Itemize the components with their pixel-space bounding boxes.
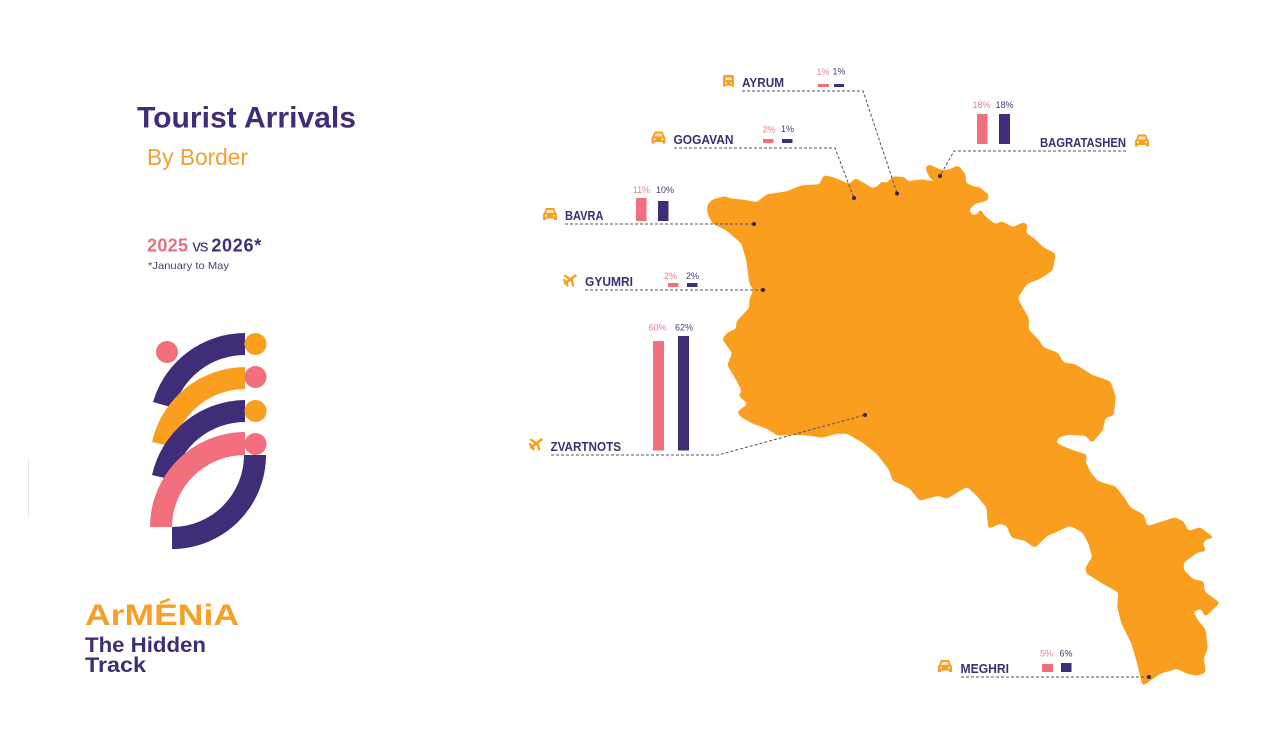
station: Zvartnots: [530, 322, 867, 455]
brand wordmark: Track: [85, 654, 146, 677]
station: Ayrum: 1%: [816, 67, 830, 77]
station: Bavra: BAVRA: [565, 209, 604, 223]
station: Bagratashen: 18%: [995, 100, 1014, 110]
icon: car: [652, 132, 666, 144]
station: Gyumri: 2%: [664, 271, 677, 281]
station: Bavra: [543, 185, 756, 226]
station: Ayrum: AYRUM: [742, 76, 784, 90]
footnote: period: *January to May: [148, 260, 230, 272]
station: Zvartnots: 62%: [675, 322, 693, 332]
station: Bagratashen: 18%: [972, 100, 991, 110]
station: Zvartnots: 60%: [648, 322, 667, 332]
station: Bavra: 11%: [633, 185, 650, 195]
brand wordmark: The Hidden: [85, 634, 206, 657]
station: Meghri: 6%: [1059, 648, 1073, 658]
station: Gyumri: [564, 271, 765, 292]
icon: train: [723, 75, 734, 87]
title: Tourist Arrivals: [137, 102, 356, 134]
station: Bagratashen: [938, 100, 1149, 178]
station: Gogavan: 2%: [762, 124, 776, 134]
station: Gogavan: GOGAVAN: [674, 133, 734, 147]
icon: plane: [530, 440, 542, 450]
station: Meghri: [938, 648, 1151, 679]
station: Ayrum: 1%: [832, 66, 846, 76]
subtitle: by border: By Border: [147, 144, 248, 170]
station: Bagratashen: BAGRATASHEN: [1040, 136, 1126, 150]
station: Ayrum: [723, 66, 899, 196]
station: Meghri: MEGHRI: [960, 662, 1009, 676]
station: Gogavan: [652, 124, 856, 200]
station: Gyumri: GYUMRI: [585, 275, 633, 289]
icon: car: [543, 208, 557, 220]
year comparison heading: 2025 vs2026*: [147, 236, 261, 256]
icon: car: [938, 660, 952, 672]
brand wordmark: ArMENiA: [85, 599, 239, 632]
logo mark: arcs and circles: [150, 333, 266, 549]
icon: plane: [564, 276, 576, 286]
station: Meghri: 5%: [1040, 648, 1053, 658]
station: Gyumri: 2%: [686, 271, 699, 281]
map of Armenia: [708, 165, 1219, 685]
station: Bavra: 10%: [656, 185, 674, 195]
icon: car: [1135, 134, 1149, 146]
station: Zvartnots: ZVARTNOTS: [550, 440, 621, 454]
station: Gogavan: 1%: [781, 124, 794, 134]
brand wordmark: [85, 599, 239, 677]
